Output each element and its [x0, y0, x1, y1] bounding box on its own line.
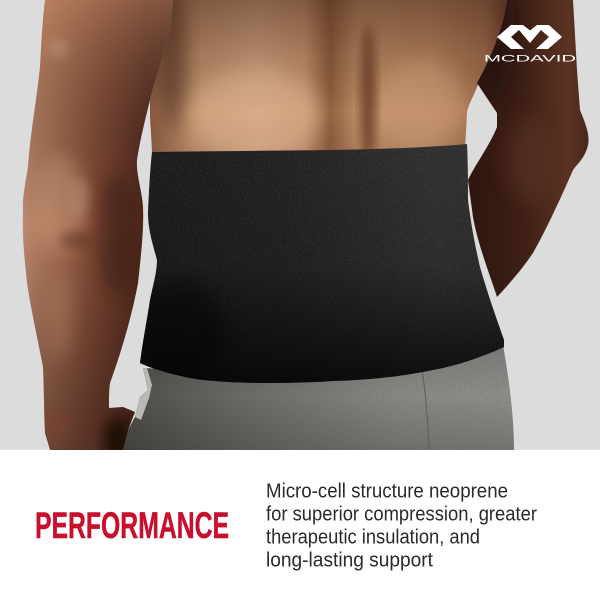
- shorts: [120, 340, 520, 450]
- logo wordmark: MCDAVID: [484, 54, 577, 64]
- photo panel background: [0, 0, 600, 450]
- McDavid logo: [484, 25, 577, 64]
- product photo: man wearing back support: [15, 0, 595, 462]
- left arm: [22, 0, 173, 450]
- torso: bare back: [150, 0, 510, 165]
- neoprene back support belt: [135, 140, 510, 390]
- logo mark: [497, 25, 562, 49]
- description text block: long-lasting support: [266, 548, 433, 572]
- right arm: [465, 0, 595, 300]
- description text block: therapeutic insulation, and: [266, 526, 480, 548]
- description text block: Micro-cell structure neoprene: [266, 480, 508, 502]
- heading: performance: PERFORMANCE: [35, 504, 229, 546]
- description text block: for superior compression, greater: [266, 502, 537, 526]
- description text block: [266, 480, 537, 572]
- white caption panel: [0, 450, 600, 600]
